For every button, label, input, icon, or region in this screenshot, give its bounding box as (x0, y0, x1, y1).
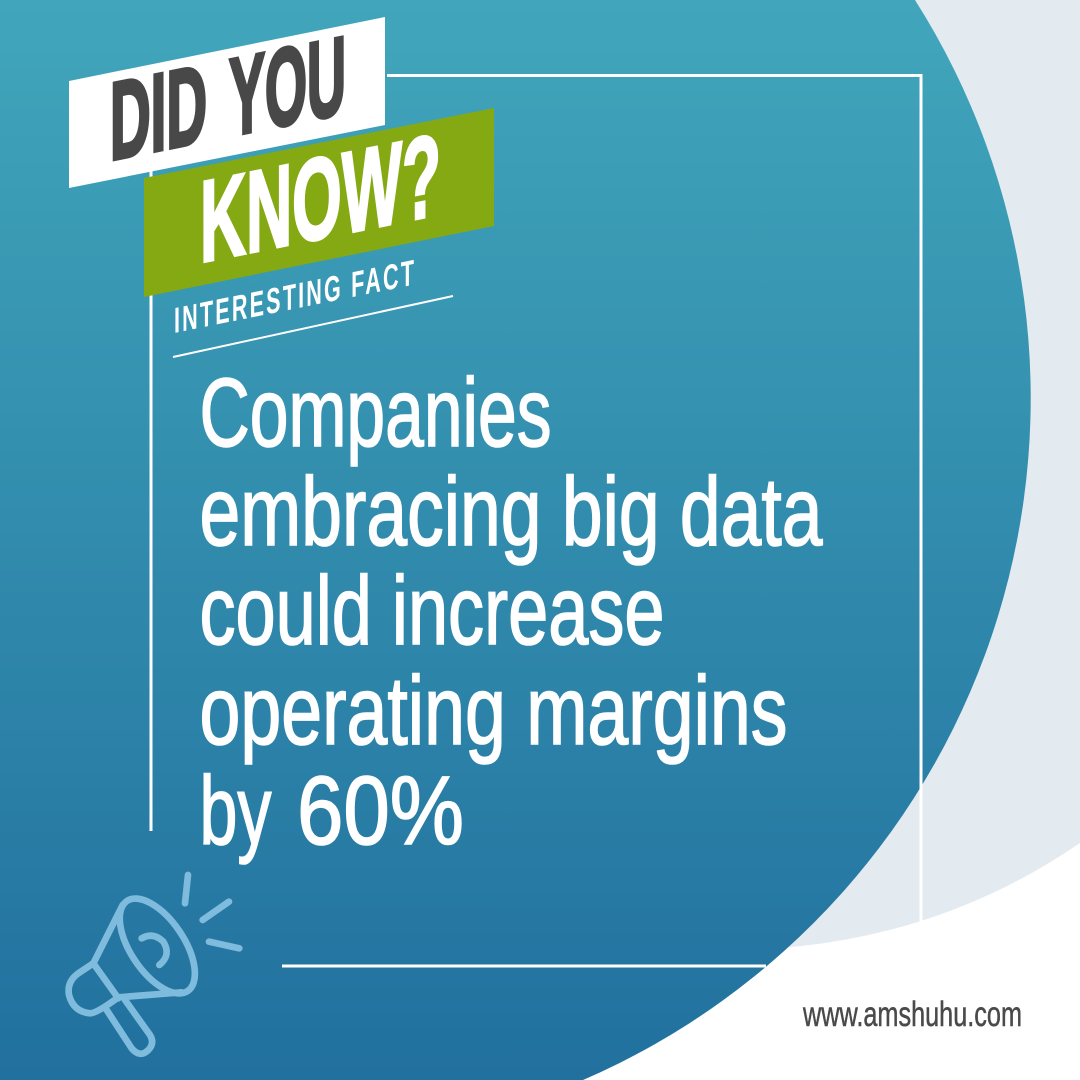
banner: know (144, 108, 494, 297)
background shape: light grey area (700, 0, 1080, 949)
main fact text: 60% (297, 756, 464, 865)
banner: know: KNOW? (200, 109, 441, 287)
frame lines (151, 76, 921, 966)
main fact text: operating margins (200, 656, 788, 765)
main fact text: by (200, 756, 272, 865)
main fact text: Companies (200, 358, 552, 467)
main fact text (200, 358, 823, 865)
main fact text: embracing big data (200, 457, 823, 566)
main fact text: could increase (200, 556, 664, 665)
subheading: interesting fact: INTERESTING FACT (174, 253, 414, 341)
banner: did you: DID (110, 40, 207, 184)
icon: megaphone (69, 875, 239, 1054)
banner: did you (69, 12, 385, 188)
